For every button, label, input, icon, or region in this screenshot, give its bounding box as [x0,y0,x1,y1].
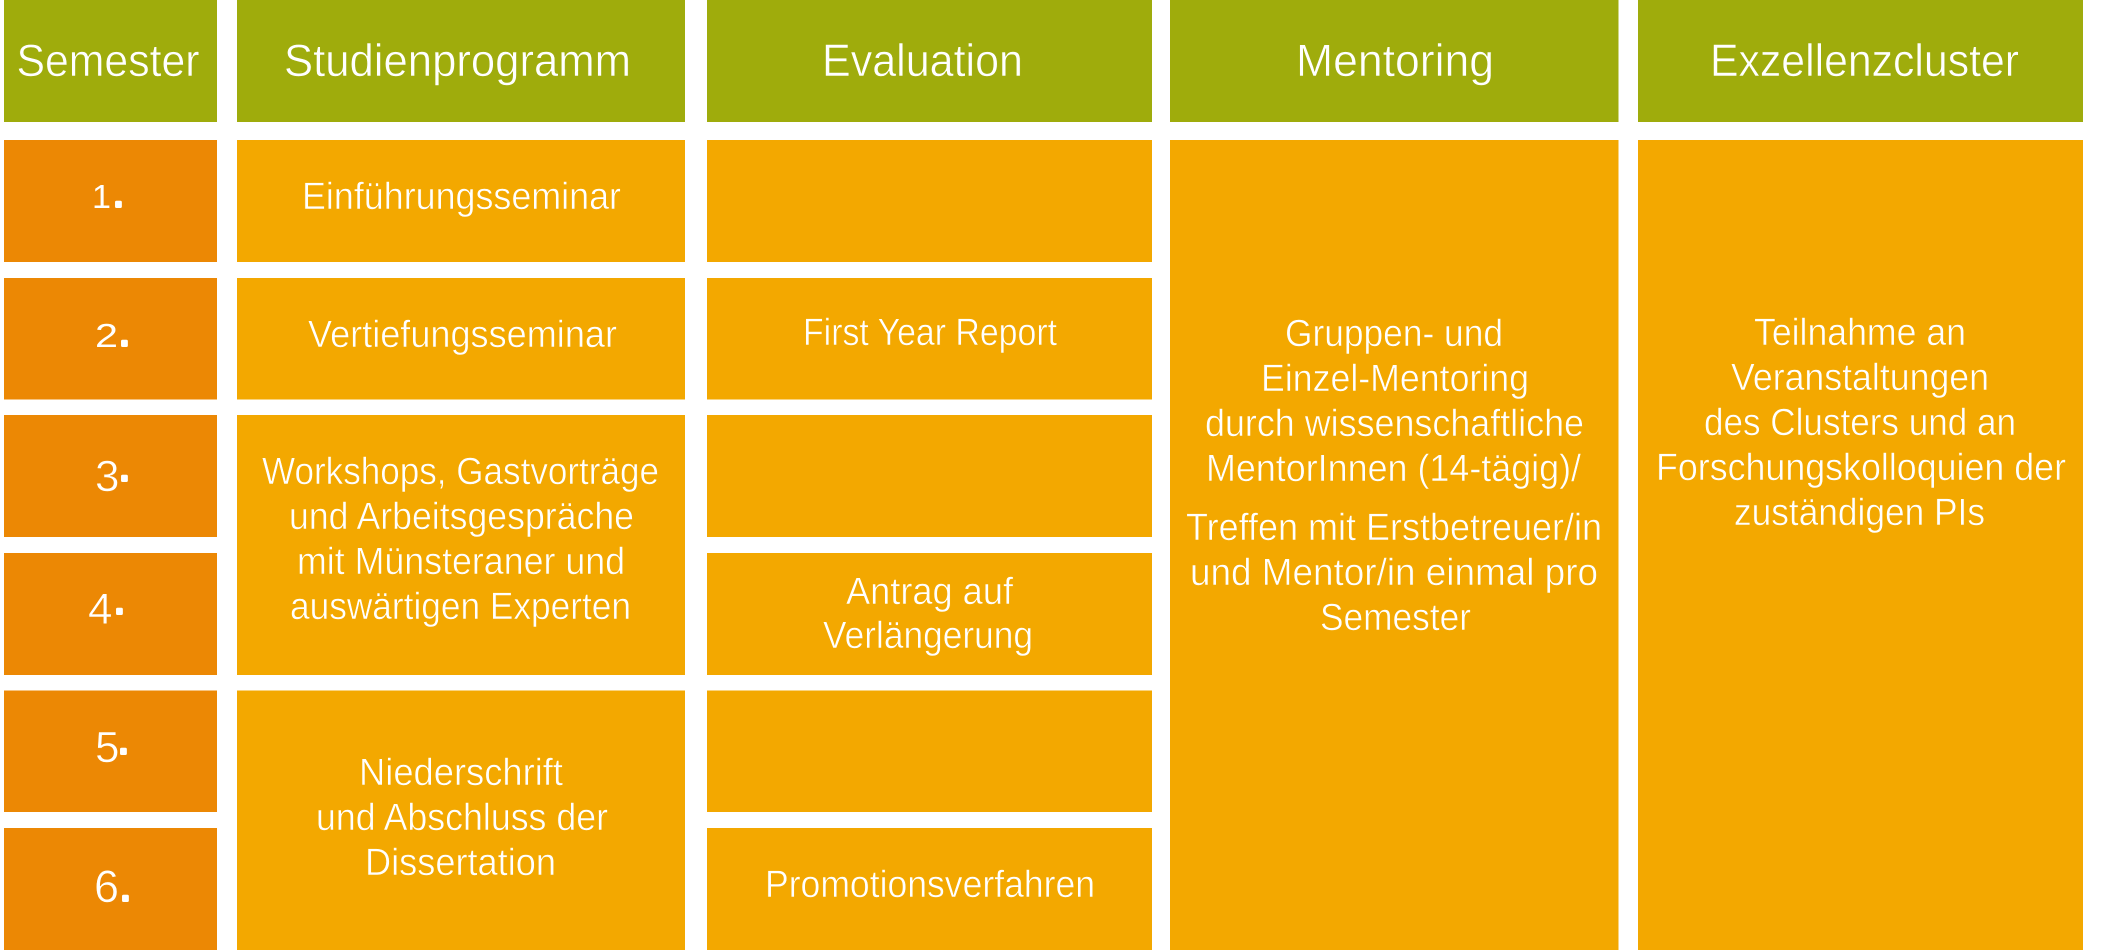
semester 3 [4,415,217,537]
semester 6 [4,828,217,950]
semester 3: 3 [95,452,119,501]
semester 1: . [113,172,124,216]
column: Evaluation [707,140,1152,950]
cell: Workshops: und Arbeitsgespräche [289,496,634,538]
cell: Antrag auf Verlängerung: Antrag auf [846,571,1013,613]
header: Evaluation [707,0,1152,122]
semester 1: 1 [92,178,111,215]
semester 5: 5 [95,723,119,772]
panel: Mentoring: und Mentor/in einmal pro [1190,552,1598,594]
semester 4: . [114,578,125,622]
cell: Niederschrift [237,690,685,950]
header: Exzellenzcluster [1638,0,2083,122]
semester 2: . [119,310,130,354]
panel: Mentoring: MentorInnen (14-tägig)/ [1206,448,1581,490]
semester 5 [4,690,217,812]
panel: Mentoring: Einzel-Mentoring [1261,358,1529,400]
cell: Einführungsseminar: Einführungsseminar [302,176,621,218]
header: Evaluation: Evaluation [822,35,1023,86]
panel: Exzellenzcluster: Forschungskolloquien der [1656,447,2066,489]
panel: Exzellenzcluster [1638,140,2083,950]
panel: Mentoring: Semester [1320,597,1471,639]
cell: empty semester 3 [707,415,1152,537]
semester 1 [4,140,217,262]
column: semester numbers [4,140,217,950]
header: Studienprogramm [237,0,685,122]
header: Semester: Semester [16,35,200,86]
semester 2 [4,278,217,400]
cell: empty semester 1 [707,140,1152,262]
cell: Niederschrift: Niederschrift [359,752,563,794]
cell: empty semester 5 [707,690,1152,812]
cell: First Year Report [707,278,1152,400]
panel: Exzellenzcluster: des Clusters und an [1704,402,2016,444]
cell: Niederschrift: und Abschluss der [316,797,608,839]
cell: Niederschrift: Dissertation [365,842,556,884]
cell: Antrag auf Verlängerung [707,553,1152,675]
semester 6: 6 [94,861,119,912]
cell: Workshops: auswärtigen Experten [290,586,631,628]
semester 3: . [119,446,130,490]
semester 4 [4,553,217,675]
semester 5: . [118,718,129,762]
cell: Workshops [237,415,685,675]
cell: Promotionsverfahren [707,828,1152,950]
panel: Mentoring: durch wissenschaftliche [1205,403,1584,445]
semester 2: 2 [95,317,118,354]
cell: Workshops: Workshops, Gastvorträge [262,451,659,493]
panel: Mentoring: Gruppen- und [1285,313,1503,355]
header: Semester [4,0,217,122]
cell: Einführungsseminar [237,140,685,262]
cell: First Year Report: First Year Report [803,312,1057,354]
semester 6: . [120,866,131,910]
panel: Exzellenzcluster: Teilnahme an [1754,312,1966,354]
cell: Vertiefungsseminar: Vertiefungsseminar [308,314,617,356]
header: Studienprogramm: Studienprogramm [284,35,631,86]
header: Exzellenzcluster: Exzellenzcluster [1710,35,2019,86]
panel: Mentoring: Treffen mit Erstbetreuer/in [1186,507,1602,549]
semester 4: 4 [88,585,112,634]
panel: Mentoring [1170,140,1618,950]
header: Mentoring [1170,0,1618,122]
header: Mentoring: Mentoring [1296,35,1494,86]
cell: Promotionsverfahren: Promotionsverfahren [765,864,1095,906]
panel: Exzellenzcluster: zuständigen PIs [1734,492,1985,534]
cell: Vertiefungsseminar [237,278,685,400]
cell: Workshops: mit Münsteraner und [297,541,625,583]
panel: Exzellenzcluster: Veranstaltungen [1731,357,1989,399]
cell: Antrag auf Verlängerung: Verlängerung [823,615,1033,657]
header row [4,0,2083,122]
column: Studienprogramm [237,140,685,950]
